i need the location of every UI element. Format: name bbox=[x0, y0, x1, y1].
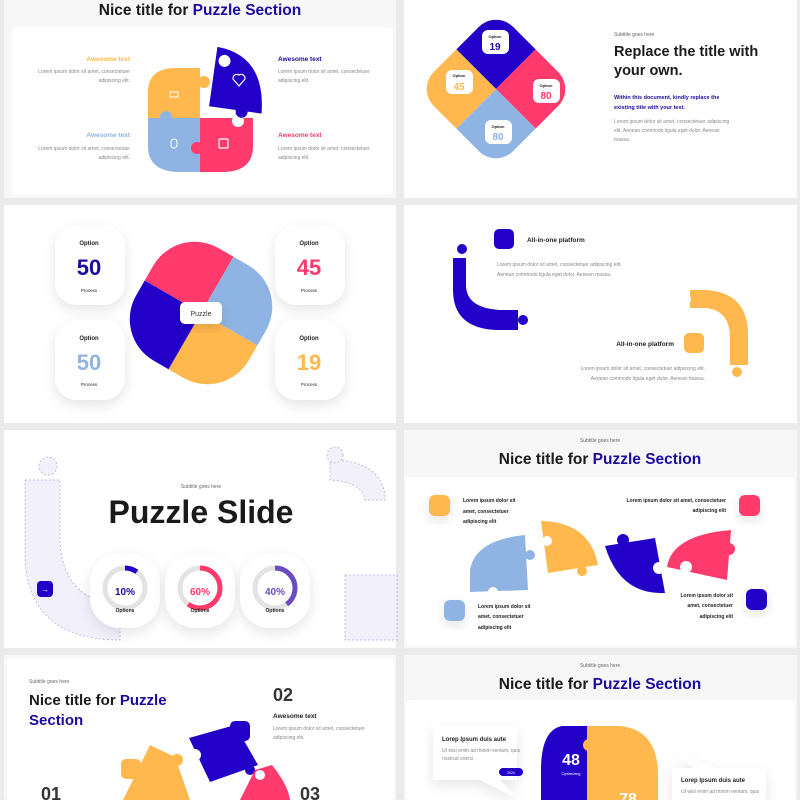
donut cards: 10% bbox=[115, 587, 135, 598]
puzzle diamond: 80 bbox=[540, 91, 552, 102]
puzzle diamond: 45 bbox=[453, 82, 465, 93]
text: left top: Lorem ipsum dolor sit amet, consectetuer bbox=[38, 69, 130, 75]
text: item 1: Aenean commodo ligula eget dolor. Aenean massa. bbox=[497, 272, 611, 278]
text: 02: 02 bbox=[273, 685, 293, 705]
text: item 2: All-in-one platform bbox=[616, 341, 674, 348]
option cards: Option bbox=[299, 241, 319, 247]
text: bottom left: adipiscing elit bbox=[478, 625, 512, 631]
option cards: 50 bbox=[77, 350, 101, 375]
puzzle diamond: Option bbox=[492, 124, 505, 129]
callout: left: Lorep Ipsum duis aute bbox=[442, 737, 507, 743]
title: slide 7: Section bbox=[29, 712, 83, 729]
donut cards: Options bbox=[116, 608, 135, 614]
text: bottom right: adipiscing elit bbox=[700, 614, 733, 620]
option cards: Process bbox=[301, 382, 318, 387]
callout: right: Ut wisi enim ad minim veniam, quis bbox=[681, 789, 760, 795]
puzzle diamond: 80 bbox=[492, 132, 504, 143]
panel: slide 3 bbox=[4, 205, 396, 423]
text: item 2 bbox=[580, 341, 705, 382]
labels 01 03 bbox=[41, 784, 320, 800]
title: slide 7: Subtitle goes here bbox=[29, 679, 70, 685]
text: top right: Lorem ipsum dolor sit amet, consectetuer bbox=[627, 498, 726, 504]
text: right top: adipiscing elit. bbox=[278, 78, 309, 84]
puzzle diamond: Option bbox=[453, 73, 466, 78]
donut cards bbox=[90, 553, 310, 628]
text block: slide 2: Subtitle goes here bbox=[614, 32, 655, 38]
yellow puzzle arc bbox=[681, 290, 748, 377]
panel: slide 1 bbox=[4, 0, 396, 198]
puzzle diamond: Option bbox=[489, 34, 502, 39]
puzzle circle: Puzzle bbox=[190, 311, 212, 318]
text block: slide 2: Lorem ipsum dolor sit amet, consectetuer adipiscing bbox=[614, 119, 730, 125]
callout: right bbox=[672, 752, 766, 800]
option cards: Option bbox=[79, 241, 99, 247]
title: slide 8: Nice title for Puzzle Section bbox=[499, 676, 701, 693]
text: right top: Awesome text bbox=[278, 56, 322, 63]
option cards: Option bbox=[79, 336, 99, 342]
option cards: 19 bbox=[297, 350, 321, 375]
text: top left: Lorem ipsum dolor sit bbox=[463, 498, 516, 504]
text: left top: adipiscing elit. bbox=[99, 78, 130, 84]
puzzle: halves: Optimizing bbox=[562, 771, 580, 776]
text: item 2: Lorem ipsum dolor sit amet, consectetuer adipiscing elit. bbox=[580, 366, 705, 372]
puzzle diamond bbox=[426, 20, 566, 158]
text: left top bbox=[38, 56, 131, 84]
icon: pink bbox=[739, 495, 760, 516]
text: right top bbox=[278, 56, 370, 84]
text: left bottom: adipiscing elit. bbox=[99, 155, 130, 161]
subtitle + title: Puzzle Slide bbox=[109, 494, 293, 530]
puzzle: halves bbox=[541, 726, 658, 800]
text: item 1 bbox=[497, 237, 622, 278]
text: item 2: Aenean commodo ligula eget dolor. Aenean massa. bbox=[591, 376, 705, 382]
panel: slide 2 bbox=[404, 0, 797, 198]
option cards: Option bbox=[299, 336, 319, 342]
donut cards: 40% bbox=[265, 587, 285, 598]
puzzle diamond: 19 bbox=[489, 42, 501, 53]
title: slide 6: Subtitle goes here bbox=[580, 438, 620, 444]
text: 02: Awesome text bbox=[273, 713, 317, 720]
subtitle + title: Subtitle goes here bbox=[181, 484, 221, 490]
arrow icon bbox=[37, 581, 53, 597]
text: bottom left: Lorem ipsum dolor sit bbox=[478, 604, 531, 610]
icon: yellow bbox=[684, 333, 704, 353]
puzzle circle bbox=[130, 242, 272, 384]
text block: slide 2: elit. Aenean commodo ligula eget dolor. Aenean bbox=[614, 128, 720, 134]
option cards: 45 bbox=[297, 255, 321, 280]
text: top left: amet, consectetuer bbox=[463, 509, 509, 515]
text block: slide 2 bbox=[614, 32, 758, 143]
text: bottom left bbox=[478, 604, 531, 631]
text: right bottom bbox=[278, 132, 370, 161]
text: bottom right: amet, consectetuer bbox=[687, 603, 733, 609]
text block: slide 2: Within this document, kindly replace the bbox=[614, 95, 719, 101]
title: slide 1: Nice title for Puzzle Section bbox=[99, 2, 301, 19]
callout: left: Ut wisi enim ad minim veniam, quis bbox=[442, 748, 521, 754]
panel: slide 5 bbox=[4, 430, 397, 648]
text: right bottom: Lorem ipsum dolor sit amet, consectetuer bbox=[278, 146, 370, 152]
text: top right: adipiscing elit bbox=[693, 508, 726, 514]
option cards: Process bbox=[81, 382, 98, 387]
panel: slide 8 bbox=[404, 655, 797, 800]
text: left bottom: Awesome text bbox=[86, 132, 131, 139]
panel: slide 4 bbox=[404, 205, 797, 423]
title: slide 8 bbox=[499, 663, 701, 693]
puzzle pieces diagonal bbox=[121, 721, 290, 800]
title: slide 8: Subtitle goes here bbox=[580, 663, 620, 669]
text: item 1: All-in-one platform bbox=[527, 237, 585, 244]
text: item 1: Lorem ipsum dolor sit amet, consectetuer adipiscing elit. bbox=[497, 262, 622, 268]
title: slide 7 bbox=[29, 679, 167, 729]
icon: heart bbox=[429, 495, 450, 516]
arrow icon: → bbox=[41, 585, 49, 594]
text: 02: adipiscing elit. bbox=[273, 735, 304, 741]
callout: right: Lorep Ipsum duis aute bbox=[681, 778, 746, 784]
title: slide 6: Nice title for Puzzle Section bbox=[499, 451, 701, 468]
panel: slide 6 bbox=[404, 430, 797, 648]
text block: slide 2: Replace the title with bbox=[614, 44, 758, 60]
text block: slide 2: massa. bbox=[614, 137, 630, 143]
option cards: Process bbox=[81, 288, 98, 293]
donut cards: Options bbox=[191, 608, 210, 614]
puzzle pieces row bbox=[470, 521, 735, 597]
text: right bottom: Awesome text bbox=[278, 132, 322, 139]
puzzle: 4 pieces bbox=[148, 47, 270, 172]
decorative dashed puzzle outlines bbox=[25, 447, 397, 640]
text: bottom right: Lorem ipsum dolor sit bbox=[680, 593, 733, 599]
text: left bottom bbox=[38, 132, 131, 161]
text: bottom right bbox=[680, 593, 733, 620]
text: right bottom: adipiscing elit. bbox=[278, 155, 309, 161]
icon: navy bbox=[494, 229, 514, 249]
donut cards: 60% bbox=[190, 587, 210, 598]
text: top left bbox=[463, 498, 516, 525]
option cards: Process bbox=[301, 288, 318, 293]
text: top left: adipiscing elit bbox=[463, 519, 497, 525]
option cards bbox=[55, 225, 345, 400]
navy puzzle arc bbox=[453, 244, 528, 330]
text: 02: Lorem ipsum dolor sit amet, consectetuer bbox=[273, 726, 365, 732]
callout: left: 2024 bbox=[507, 771, 515, 775]
panel: slide 7 bbox=[4, 655, 396, 800]
callout: left: nostrud exerci bbox=[442, 756, 473, 762]
text block: slide 2: existing title with your text. bbox=[614, 105, 685, 111]
text: 02 bbox=[273, 685, 365, 741]
puzzle: halves: 48 bbox=[562, 752, 580, 769]
puzzle diamond: Option bbox=[540, 83, 553, 88]
icon: mouse bbox=[444, 600, 465, 621]
text: top right bbox=[627, 498, 726, 514]
icon: save bbox=[746, 589, 767, 610]
text: left bottom: Lorem ipsum dolor sit amet, consectetuer bbox=[38, 146, 130, 152]
text block: slide 2: your own. bbox=[614, 63, 682, 79]
option cards: 50 bbox=[77, 255, 101, 280]
text: bottom left: amet, consectetuer bbox=[478, 614, 524, 620]
title: slide 7: Nice title for Puzzle bbox=[29, 692, 167, 709]
donut cards: Options bbox=[266, 608, 285, 614]
text: left top: Awesome text bbox=[86, 56, 131, 63]
text: right top: Lorem ipsum dolor sit amet, consectetuer bbox=[278, 69, 370, 75]
title: slide 6 bbox=[499, 438, 701, 468]
callout: left bbox=[433, 726, 523, 800]
